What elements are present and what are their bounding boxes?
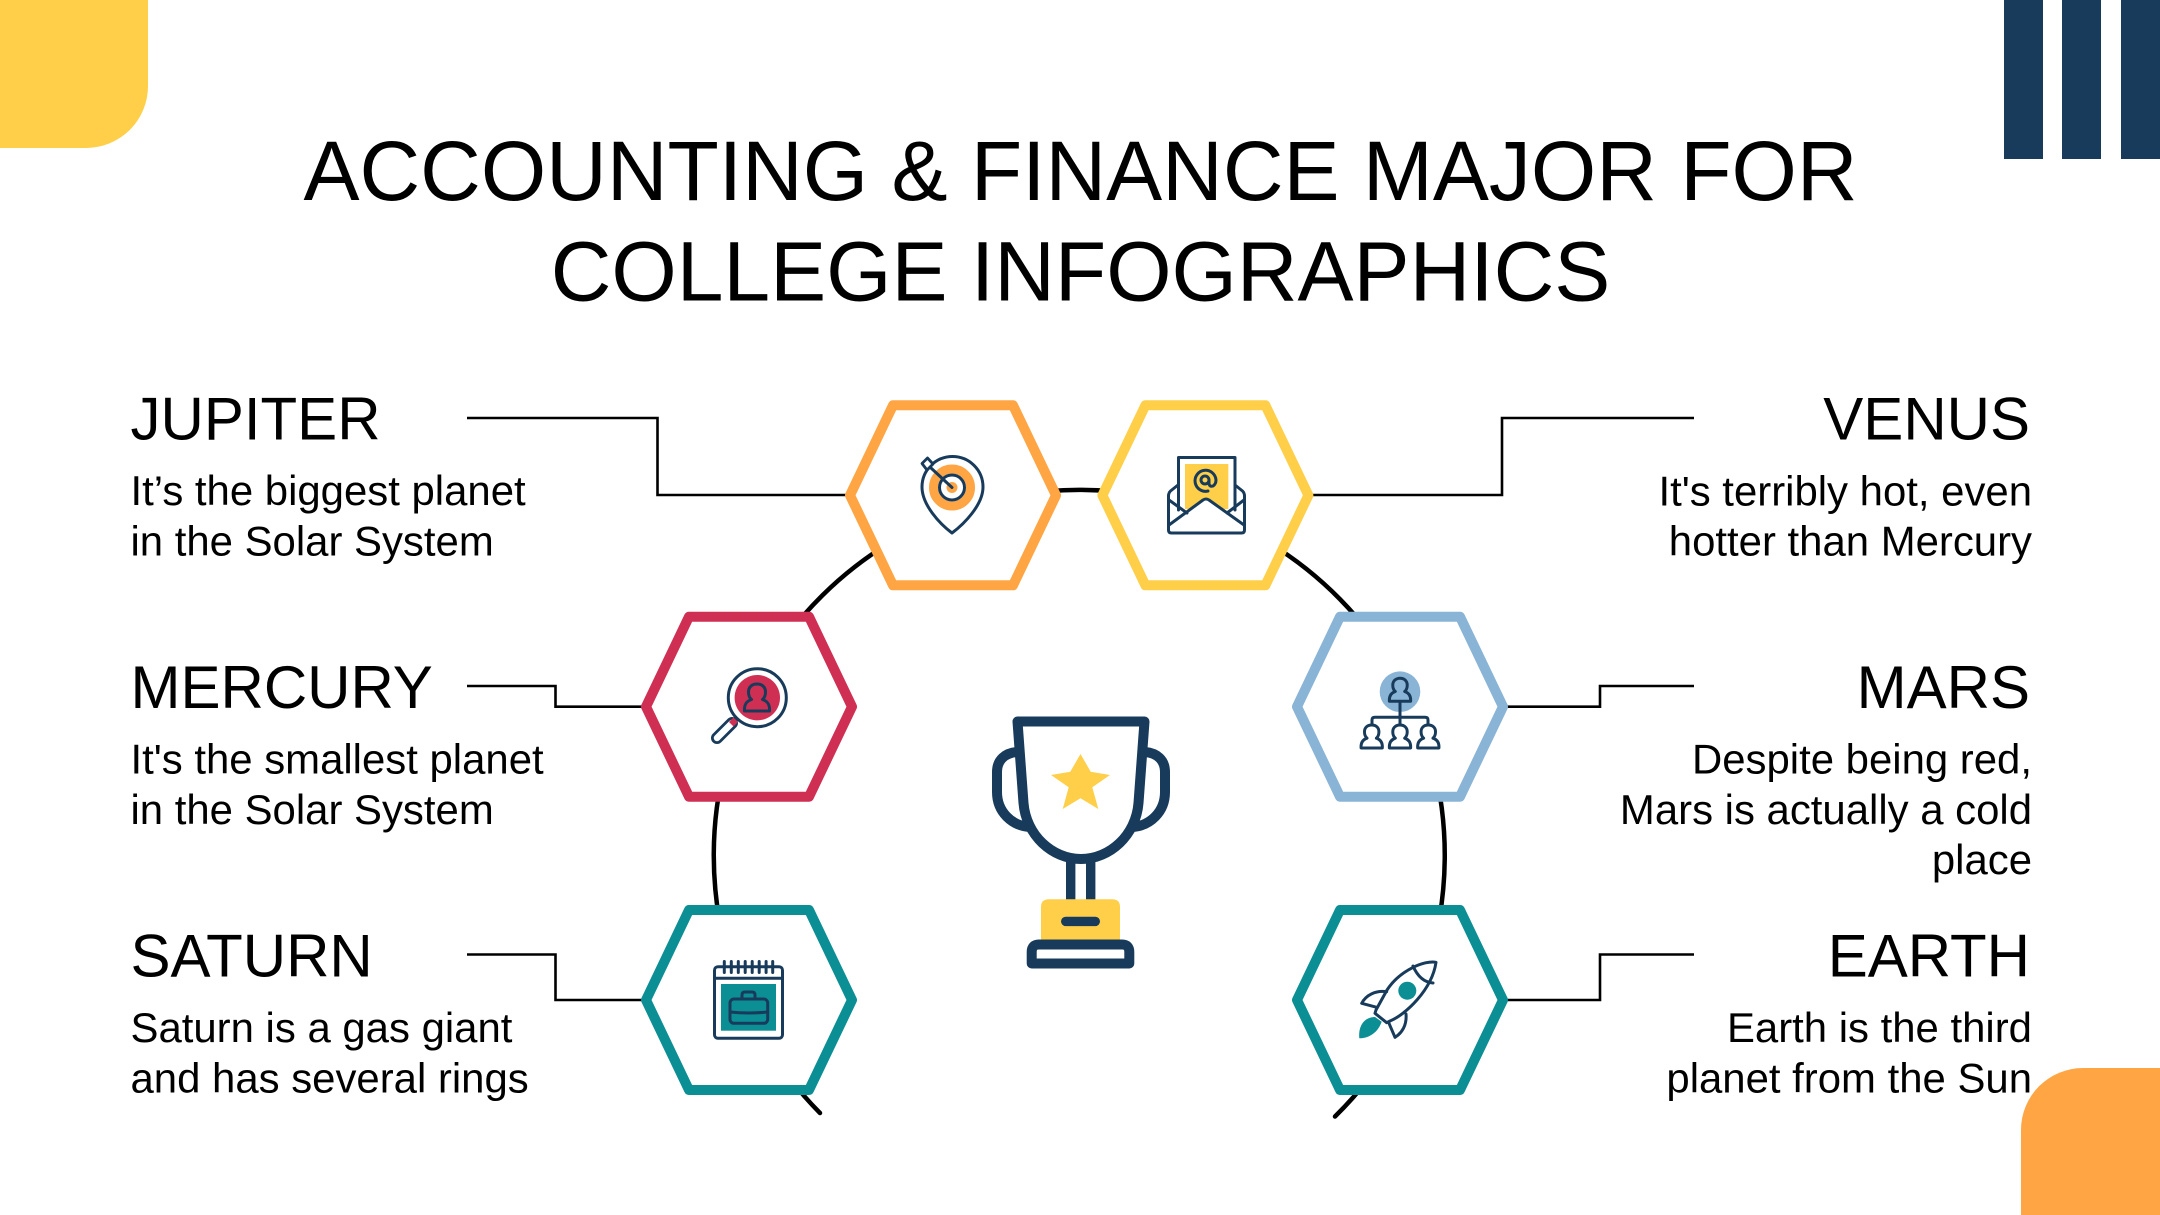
text: Mars: Mars is actually a cold <box>1620 786 2032 833</box>
title: COLLEGE INFOGRAPHICS <box>551 224 1610 318</box>
text: Saturn: Saturn is a gas giant <box>130 1004 513 1051</box>
text: Saturn <box>130 923 529 1101</box>
text: Mercury <box>130 654 544 833</box>
icon: rocket <box>1359 962 1436 1038</box>
icon: location target <box>922 456 983 533</box>
decoration: orange corner <box>2021 1068 2160 1215</box>
connector: Venus <box>1309 418 1694 495</box>
hexagon: orange target <box>850 405 1056 585</box>
decoration: yellow corner <box>0 0 148 148</box>
connector: Mars <box>1504 686 1694 707</box>
icon: trophy <box>997 722 1165 964</box>
text: Jupiter: It’s the biggest planet <box>130 467 526 514</box>
icon: org chart <box>1361 671 1439 748</box>
text: Venus <box>1658 386 2032 565</box>
connector: Mercury <box>467 686 645 707</box>
icon: calendar with briefcase <box>714 962 782 1038</box>
hexagon: blue org chart <box>1297 617 1503 797</box>
connector: Jupiter <box>467 418 850 495</box>
hexagon: teal calendar <box>646 910 852 1090</box>
text: Earth: planet from the Sun <box>1666 1054 2032 1101</box>
text: Saturn: SATURN <box>130 923 373 990</box>
hexagon: teal rocket <box>1297 910 1503 1090</box>
text: Mars: Despite being red, <box>1692 736 2032 782</box>
icon: email envelope <box>1168 458 1244 533</box>
text: Mars: place <box>1932 836 2032 883</box>
text: Earth: Earth is the third <box>1727 1004 2032 1051</box>
icon: magnifier with person <box>717 669 786 738</box>
text: Jupiter: JUPITER <box>130 386 381 453</box>
text: Earth: EARTH <box>1828 923 2030 990</box>
connector: Earth <box>1504 954 1694 1000</box>
text: Jupiter: in the Solar System <box>130 517 494 564</box>
connector: Saturn <box>467 954 645 1000</box>
text: Mercury: MERCURY <box>130 654 433 721</box>
text: Venus: hotter than Mercury <box>1669 518 2032 565</box>
title: ACCOUNTING & FINANCE MAJOR FOR <box>303 124 1858 218</box>
text: Mercury: in the Solar System <box>130 786 494 833</box>
hexagon: red search <box>646 617 852 797</box>
text: Mercury: It's the smallest planet <box>130 736 544 782</box>
title <box>303 124 1858 318</box>
text: Saturn: and has several rings <box>130 1054 529 1101</box>
text: Venus: It's terribly hot, even <box>1658 467 2032 514</box>
circular arc behind hexagons <box>714 490 1445 1116</box>
text: Venus: VENUS <box>1823 386 2030 453</box>
text: Mars: MARS <box>1857 654 2030 721</box>
decoration: navy bars <box>2004 0 2160 159</box>
text: Jupiter <box>130 386 526 564</box>
text: Mars <box>1620 654 2032 883</box>
text: Earth <box>1666 923 2032 1101</box>
hexagon: yellow email <box>1102 405 1308 585</box>
